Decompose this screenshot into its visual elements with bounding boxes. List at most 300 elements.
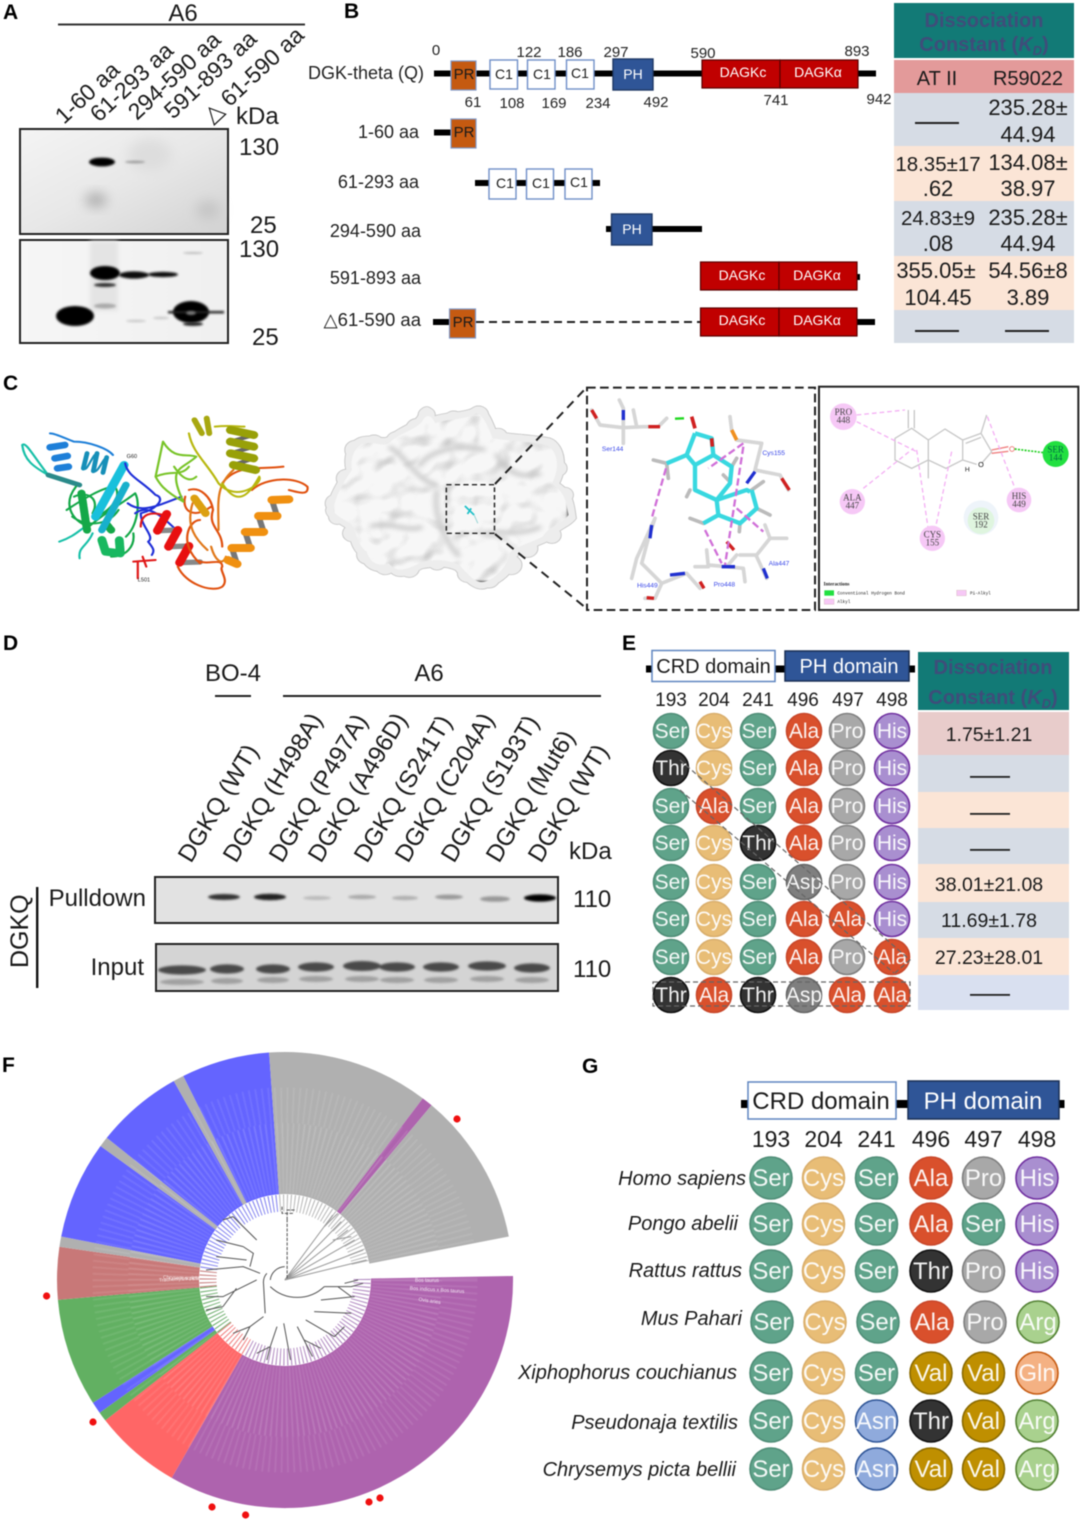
row Rattus rattus: Cys bbox=[803, 1258, 844, 1285]
side labels: 110 bbox=[573, 886, 611, 913]
full-length DGK-theta construct: 942 bbox=[866, 91, 892, 108]
row C204A bbox=[654, 788, 910, 824]
dissociation constant table B bbox=[894, 3, 1074, 343]
dissociation constant table B: 24.83±9 bbox=[901, 207, 975, 230]
row Mut6: Ala bbox=[832, 984, 862, 1007]
construct 294-590 aa: PH bbox=[622, 221, 642, 237]
row Mus Pahari: Ser bbox=[859, 1309, 897, 1336]
panel letter B: B bbox=[344, 0, 359, 23]
row Chrysemys picta bellii: Ser bbox=[752, 1456, 790, 1483]
residue discs: 144 bbox=[1049, 452, 1063, 462]
BO-4 and A6 headings: BO-4 bbox=[205, 660, 261, 687]
construct 1-60 aa: PR bbox=[454, 124, 475, 141]
residue sticks bbox=[592, 400, 789, 598]
residue numbers: 204 bbox=[698, 690, 730, 711]
side labels bbox=[6, 838, 612, 988]
full-length DGK-theta construct: DAGKc bbox=[720, 64, 766, 80]
construct delta 61-590 aa: △61-590 aa bbox=[323, 309, 422, 330]
row P497A: Cys bbox=[696, 908, 732, 931]
molecular weight labels bbox=[236, 103, 279, 351]
full-length DGK-theta construct: PH bbox=[623, 66, 643, 82]
row H498A: Pro bbox=[831, 946, 863, 969]
row WT: Cys bbox=[696, 720, 732, 743]
BO-4 and A6 headings: A6 bbox=[414, 660, 444, 687]
row A496D: Asp bbox=[786, 871, 822, 894]
residue discs bbox=[830, 403, 1069, 551]
construct delta 61-590 aa: PR bbox=[453, 314, 474, 331]
row H498A: Ser bbox=[655, 946, 687, 969]
full-length DGK-theta construct: 893 bbox=[844, 43, 870, 60]
row Mus Pahari: Pro bbox=[966, 1309, 1004, 1336]
dissociation constant table B: 235.28± bbox=[988, 205, 1068, 230]
side labels: 110 bbox=[573, 956, 611, 983]
row Xiphophorus couchianus: Ser bbox=[752, 1360, 790, 1387]
panel F: circular phylogenetic tree bbox=[2, 1052, 513, 1519]
dissociation constant table B: 235.28± bbox=[988, 95, 1068, 120]
residue numbers: 193 bbox=[752, 1126, 790, 1152]
row Rattus rattus: Ser bbox=[752, 1258, 790, 1285]
construct 591-893 aa bbox=[330, 262, 860, 290]
row S241T: Pro bbox=[831, 832, 863, 855]
row WT: Ala bbox=[789, 720, 819, 743]
row Xiphophorus couchianus bbox=[517, 1352, 1058, 1394]
dissociation constant table B: 355.05± bbox=[896, 258, 976, 283]
rotated mutant labels: DGKQ (H498A) bbox=[218, 709, 328, 867]
ribbon model of DGK-theta: G60 bbox=[127, 454, 137, 460]
row Mus Pahari: Ala bbox=[915, 1309, 950, 1336]
panel G: species residue conservation bbox=[517, 1055, 1064, 1490]
row Homo sapiens: His bbox=[1020, 1165, 1054, 1192]
residue discs: HIS bbox=[1012, 491, 1026, 501]
dissociation constant table B: Dissociation bbox=[925, 10, 1043, 32]
molecular weight labels: 130 bbox=[239, 134, 279, 161]
interaction legend bbox=[824, 582, 991, 605]
row Rattus rattus: Rattus rattus bbox=[629, 1260, 742, 1282]
panel C: protein structure and docking views bbox=[3, 372, 1078, 610]
row C204A: Ala bbox=[789, 795, 819, 818]
row Xiphophorus couchianus: Cys bbox=[803, 1360, 844, 1387]
residue labels: His449 bbox=[637, 583, 658, 590]
pulldown blot bbox=[155, 877, 558, 923]
row A496D: Ser bbox=[655, 871, 687, 894]
row S193T: His bbox=[877, 757, 907, 780]
ribbon model of DGK-theta: L501 bbox=[138, 578, 150, 583]
rotated mutant labels: DGKQ (A496D) bbox=[303, 709, 413, 867]
residue discs: 447 bbox=[846, 500, 860, 510]
row Homo sapiens: Ala bbox=[914, 1165, 949, 1192]
3D docking pose panel bbox=[587, 388, 815, 610]
row Chrysemys picta bellii: Asn bbox=[856, 1456, 897, 1483]
full-length DGK-theta construct: 122 bbox=[516, 44, 542, 61]
full-length DGK-theta construct: 186 bbox=[557, 44, 583, 61]
dissociation constant table B: 44.94 bbox=[1000, 231, 1056, 256]
ligand skeleton: O bbox=[978, 460, 984, 469]
construct 61-293 aa: C1 bbox=[532, 175, 550, 191]
row P497A: His bbox=[877, 908, 907, 931]
2D interaction diagram panel bbox=[819, 387, 1078, 610]
panel letter E: E bbox=[622, 632, 636, 655]
row WT: His bbox=[877, 720, 907, 743]
residue discs: CYS bbox=[924, 529, 941, 539]
construct 294-590 aa: 294-590 aa bbox=[330, 221, 422, 241]
input blot bbox=[156, 944, 558, 991]
row S193T: Cys bbox=[696, 757, 732, 780]
full-length DGK-theta construct: C1 bbox=[533, 66, 551, 82]
residue discs: SER bbox=[973, 511, 989, 521]
species label streaks and readable labels: Trachemys scripta bbox=[159, 1275, 200, 1284]
row Mus Pahari: Mus Pahari bbox=[641, 1308, 743, 1330]
row Pongo abelii: Pongo abelii bbox=[628, 1213, 739, 1235]
panel letter D: D bbox=[3, 632, 18, 655]
row Rattus rattus: Ser bbox=[858, 1258, 895, 1285]
ligand skeleton bbox=[895, 410, 1014, 478]
rotated mutant labels: DGKQ (S241T) bbox=[349, 711, 458, 867]
row Chrysemys picta bellii: Val bbox=[915, 1456, 947, 1483]
dissociation constant table B: 54.56±8 bbox=[988, 258, 1068, 283]
row P497A bbox=[654, 902, 910, 936]
species label streaks and readable labels bbox=[110, 1105, 465, 1455]
interaction bonds bbox=[652, 418, 763, 565]
row Homo sapiens bbox=[618, 1157, 1058, 1199]
row S193T: Ala bbox=[789, 757, 819, 780]
interaction legend: Conventional Hydrogen Bond bbox=[837, 592, 905, 597]
rotated mutant labels: DGKQ (WT) bbox=[523, 740, 614, 867]
full-length DGK-theta construct: 169 bbox=[541, 95, 567, 112]
row S193T bbox=[654, 750, 910, 786]
row Pongo abelii: Ser bbox=[752, 1211, 790, 1238]
row Pseudonaja textilis: Ser bbox=[752, 1408, 790, 1435]
side labels: kDa bbox=[569, 838, 612, 865]
row Chrysemys picta bellii bbox=[543, 1448, 1058, 1490]
row Rattus rattus: Pro bbox=[965, 1258, 1002, 1285]
domain bar: CRD domain bbox=[656, 656, 771, 678]
full-length DGK-theta construct: 590 bbox=[690, 45, 716, 62]
residue labels: Ala447 bbox=[769, 561, 790, 568]
row Pseudonaja textilis bbox=[571, 1400, 1058, 1442]
construct 591-893 aa: DAGKc bbox=[719, 267, 765, 283]
row A496D bbox=[654, 864, 910, 900]
row H498A: Ser bbox=[742, 946, 774, 969]
panel B: domain constructs and dissociation table bbox=[308, 0, 1074, 343]
row Mut6: Ala bbox=[877, 984, 907, 1007]
residue labels: Pro448 bbox=[714, 581, 735, 588]
dissociation constant table B: Constant (K bbox=[919, 34, 1033, 56]
side labels: Pulldown bbox=[49, 885, 146, 912]
row Homo sapiens: Cys bbox=[803, 1165, 844, 1192]
dissociation constant table B: R59022 bbox=[993, 68, 1063, 90]
row Xiphophorus couchianus: Ser bbox=[858, 1360, 895, 1387]
heading A6 with rule: A6 bbox=[168, 0, 198, 27]
interaction lines bbox=[857, 410, 1044, 530]
dissociation constant table E: 11.69±1.78 bbox=[941, 910, 1037, 932]
full-length DGK-theta construct: 108 bbox=[499, 95, 525, 112]
row Pongo abelii: Ser bbox=[858, 1211, 895, 1238]
dissociation constant table E: 27.23±28.01 bbox=[935, 947, 1043, 969]
residue numbers bbox=[752, 1126, 1056, 1152]
rotated mutant labels: DGKQ (C204A) bbox=[390, 709, 500, 867]
dissociation constant table E: Constant (K bbox=[928, 687, 1042, 709]
row Pseudonaja textilis: Asn bbox=[856, 1408, 897, 1435]
side labels: DGKQ bbox=[6, 894, 34, 968]
dissociation constant table E: ) bbox=[1051, 687, 1058, 709]
dissociation constant table B: .62 bbox=[923, 176, 953, 201]
rotated lane labels: 61-293 aa bbox=[85, 37, 178, 127]
row Mut6: Asp bbox=[786, 984, 822, 1007]
inner tree disc bbox=[199, 1194, 371, 1366]
dissociation constant table B: 134.08± bbox=[988, 150, 1068, 175]
dissociation constant table E: 1.75±1.21 bbox=[946, 724, 1032, 746]
dissociation constant table B: 44.94 bbox=[1000, 122, 1056, 147]
row P497A: Ala bbox=[832, 908, 862, 931]
row Pseudonaja textilis: Val bbox=[967, 1408, 1000, 1435]
construct 61-293 aa: C1 bbox=[496, 175, 514, 191]
dissociation constant table B: AT II bbox=[917, 68, 957, 90]
row C204A: Pro bbox=[831, 795, 863, 818]
rotated lane labels: 294-590 aa bbox=[123, 26, 226, 125]
residue discs: PRO bbox=[835, 407, 853, 417]
row S241T: Ala bbox=[789, 832, 819, 855]
row S193T: Thr bbox=[655, 757, 687, 780]
row Rattus rattus: His bbox=[1020, 1258, 1054, 1285]
domain bar bbox=[646, 650, 915, 682]
red reference dots bbox=[43, 1115, 461, 1519]
row Homo sapiens: Ser bbox=[858, 1165, 895, 1192]
dissociation constant table B: 104.45 bbox=[904, 285, 972, 310]
molecular surface model bbox=[326, 406, 576, 589]
dissociation constant table E: D bbox=[1042, 696, 1052, 711]
row S193T: Pro bbox=[831, 757, 863, 780]
panel letter C: C bbox=[3, 372, 18, 395]
interaction legend: Alkyl bbox=[837, 600, 851, 605]
row S193T: Ser bbox=[742, 757, 774, 780]
rotated mutant labels: DGKQ (Mut6) bbox=[481, 726, 581, 867]
row WT bbox=[654, 714, 910, 748]
molecular weight labels: 130 bbox=[239, 236, 279, 263]
full-length DGK-theta construct bbox=[308, 42, 892, 112]
residue numbers: 498 bbox=[1018, 1126, 1056, 1152]
row Chrysemys picta bellii: Cys bbox=[803, 1456, 844, 1483]
residue numbers: 497 bbox=[832, 690, 864, 711]
full-length DGK-theta construct: 297 bbox=[603, 44, 629, 61]
construct 61-293 aa bbox=[338, 169, 600, 199]
construct 61-293 aa: C1 bbox=[570, 174, 588, 190]
row Pongo abelii bbox=[628, 1203, 1058, 1245]
row Mut6: Thr bbox=[742, 984, 774, 1007]
row Xiphophorus couchianus: Val bbox=[967, 1360, 1000, 1387]
row A496D: His bbox=[877, 871, 907, 894]
row Xiphophorus couchianus: Gln bbox=[1018, 1360, 1056, 1387]
full-length DGK-theta construct: 741 bbox=[763, 92, 789, 109]
full-length DGK-theta construct: 61 bbox=[465, 94, 481, 111]
domain bar: CRD domain bbox=[752, 1088, 890, 1115]
rotated mutant labels bbox=[173, 709, 614, 867]
domain bar bbox=[741, 1081, 1064, 1119]
row Chrysemys picta bellii: Chrysemys picta bellii bbox=[543, 1459, 737, 1481]
row Chrysemys picta bellii: Arg bbox=[1018, 1456, 1056, 1483]
domain bar: PH domain bbox=[924, 1088, 1042, 1115]
row Mus Pahari: Arg bbox=[1019, 1309, 1057, 1336]
row WT: Pro bbox=[831, 720, 863, 743]
species label streaks and readable labels: Chrysemys picta bbox=[163, 1275, 200, 1282]
tree branches bbox=[206, 1207, 367, 1360]
dashed mutation highlights bbox=[653, 760, 910, 1006]
species label streaks and readable labels: Ovis aries bbox=[418, 1297, 441, 1306]
dissociation constant table E: Dissociation bbox=[934, 657, 1052, 679]
interaction legend: Interactions bbox=[824, 582, 849, 587]
row A496D: Pro bbox=[831, 871, 863, 894]
row C204A: His bbox=[877, 795, 907, 818]
full-length DGK-theta construct: PR bbox=[454, 66, 475, 83]
row P497A: Ser bbox=[742, 908, 774, 931]
coloured clade sectors bbox=[57, 1052, 513, 1508]
rotated mutant labels: DGKQ (WT) bbox=[173, 740, 264, 867]
row Xiphophorus couchianus: Xiphophorus couchianus bbox=[517, 1362, 737, 1384]
residue discs: 448 bbox=[837, 415, 851, 425]
row Xiphophorus couchianus: Val bbox=[915, 1360, 947, 1387]
residue numbers: 497 bbox=[964, 1126, 1003, 1152]
BO-4 and A6 headings bbox=[205, 660, 601, 697]
row Mut6: Thr bbox=[655, 984, 687, 1007]
dissociation constant table E bbox=[918, 652, 1069, 1010]
construct delta 61-590 aa: DAGKc bbox=[719, 312, 765, 328]
rotated lane labels: 591-893 aa bbox=[159, 25, 262, 124]
row Mus Pahari: Ser bbox=[753, 1309, 791, 1336]
row Pseudonaja textilis: Cys bbox=[803, 1408, 844, 1435]
residue discs: 155 bbox=[926, 537, 940, 547]
row P497A: Ala bbox=[789, 908, 819, 931]
lower blot bbox=[20, 240, 228, 343]
residue numbers bbox=[655, 690, 908, 711]
construct 61-293 aa: 61-293 aa bbox=[338, 172, 420, 192]
full-length DGK-theta construct: 234 bbox=[585, 95, 611, 112]
dissociation constant table E: 38.01±21.08 bbox=[935, 874, 1043, 896]
full-length DGK-theta construct: 492 bbox=[643, 94, 669, 111]
residue numbers: 496 bbox=[912, 1126, 950, 1152]
row Mut6: Ala bbox=[699, 984, 729, 1007]
residue numbers: 241 bbox=[742, 690, 774, 711]
row Pseudonaja textilis: Thr bbox=[913, 1408, 949, 1435]
side labels: Input bbox=[91, 954, 144, 981]
residue discs: 192 bbox=[974, 519, 988, 529]
row Mut6 bbox=[654, 978, 910, 1012]
species label streaks and readable labels: Bos indicus x Bos taurus bbox=[410, 1286, 465, 1295]
construct 591-893 aa: 591-893 aa bbox=[330, 268, 422, 288]
residue labels: Cys155 bbox=[762, 450, 785, 457]
row C204A: Ser bbox=[742, 795, 774, 818]
row H498A: Cys bbox=[696, 946, 732, 969]
dissociation constant table B: ) bbox=[1042, 34, 1049, 56]
residue circle grid bbox=[653, 714, 910, 1012]
row S241T: Cys bbox=[696, 832, 732, 855]
residue numbers: 241 bbox=[857, 1126, 896, 1152]
row Rattus rattus: Thr bbox=[913, 1258, 949, 1285]
residue labels: Ser144 bbox=[602, 446, 624, 453]
row Rattus rattus bbox=[629, 1250, 1058, 1292]
row H498A: Ala bbox=[877, 946, 907, 969]
row S241T bbox=[654, 826, 910, 860]
ligand skeleton: H bbox=[965, 467, 970, 474]
full-length DGK-theta construct: DGK-theta (Q) bbox=[308, 63, 424, 83]
row C204A: Ser bbox=[655, 795, 687, 818]
row Pongo abelii: His bbox=[1020, 1211, 1054, 1238]
rotated lane labels: △ 61-590 aa bbox=[198, 21, 309, 128]
dashed zoom connector lines bbox=[495, 388, 586, 608]
panel A: western blots of DGK-theta fragments bbox=[3, 0, 309, 351]
row Pseudonaja textilis: Arg bbox=[1018, 1408, 1056, 1435]
full-length DGK-theta construct: 0 bbox=[432, 42, 440, 59]
row S241T: His bbox=[877, 832, 907, 855]
construct delta 61-590 aa bbox=[323, 308, 875, 338]
molecular weight labels: 25 bbox=[252, 324, 279, 351]
row Pongo abelii: Cys bbox=[803, 1211, 844, 1238]
row WT: Ser bbox=[655, 720, 687, 743]
row Chrysemys picta bellii: Val bbox=[967, 1456, 1000, 1483]
interaction legend: Pi-Alkyl bbox=[970, 592, 991, 597]
molecular weight labels: kDa bbox=[236, 103, 279, 130]
full-length DGK-theta construct: DAGKα bbox=[794, 64, 842, 80]
rotated lane labels: 1-60 aa bbox=[50, 56, 125, 129]
row A496D: Ser bbox=[742, 871, 774, 894]
dissociation constant table B: 18.35±17 bbox=[895, 153, 981, 176]
dissociation constant table B: .08 bbox=[923, 231, 953, 256]
row Mus Pahari bbox=[641, 1301, 1059, 1343]
row A496D: Cys bbox=[696, 871, 732, 894]
panel letter F: F bbox=[2, 1054, 15, 1077]
row WT: Ser bbox=[742, 720, 774, 743]
row Pseudonaja textilis: Pseudonaja textilis bbox=[571, 1412, 738, 1434]
row Mus Pahari: Cys bbox=[804, 1309, 846, 1336]
row H498A: Ala bbox=[789, 946, 819, 969]
row Homo sapiens: Homo sapiens bbox=[618, 1168, 746, 1190]
residue numbers: 193 bbox=[655, 690, 687, 711]
species label streaks and readable labels: Bos taurus bbox=[415, 1278, 439, 1284]
dissociation constant table B: 38.97 bbox=[1000, 176, 1056, 201]
rotated mutant labels: DGKQ (P497A) bbox=[264, 710, 373, 867]
construct 1-60 aa bbox=[358, 119, 476, 148]
construct delta 61-590 aa: DAGKα bbox=[793, 312, 841, 328]
residue numbers: 204 bbox=[804, 1126, 843, 1152]
construct 591-893 aa: DAGKα bbox=[793, 267, 841, 283]
row P497A: Ser bbox=[655, 908, 687, 931]
residue discs: 449 bbox=[1012, 499, 1026, 509]
panel D: pulldown of DGKQ mutants bbox=[3, 632, 614, 991]
row Pongo abelii: Ser bbox=[965, 1211, 1002, 1238]
row Homo sapiens: Pro bbox=[965, 1165, 1002, 1192]
row S241T: Thr bbox=[742, 832, 774, 855]
residue discs: SER bbox=[1047, 444, 1064, 454]
row Pongo abelii: Ala bbox=[914, 1211, 949, 1238]
rotated mutant labels: DGKQ (S193T) bbox=[436, 711, 545, 867]
panel letter A: A bbox=[3, 1, 18, 24]
panel E: residue mutations and dissociation table bbox=[622, 632, 1069, 1012]
row S241T: Ser bbox=[655, 832, 687, 855]
row C204A: Ala bbox=[699, 795, 729, 818]
dissociation constant table B: D bbox=[1033, 43, 1043, 58]
upper blot bbox=[20, 129, 228, 234]
residue discs: ALA bbox=[843, 493, 862, 503]
residue numbers: 496 bbox=[787, 690, 819, 711]
domain bar: PH domain bbox=[800, 656, 898, 678]
residue numbers: 498 bbox=[876, 690, 908, 711]
row Homo sapiens: Ser bbox=[752, 1165, 790, 1192]
full-length DGK-theta construct: C1 bbox=[571, 65, 589, 81]
panel letter G: G bbox=[582, 1055, 598, 1078]
construct 1-60 aa: 1-60 aa bbox=[358, 122, 420, 142]
ligand sticks bbox=[653, 417, 770, 532]
full-length DGK-theta construct: C1 bbox=[495, 66, 513, 82]
molecular weight labels: 25 bbox=[250, 212, 277, 239]
residue labels bbox=[602, 446, 790, 590]
